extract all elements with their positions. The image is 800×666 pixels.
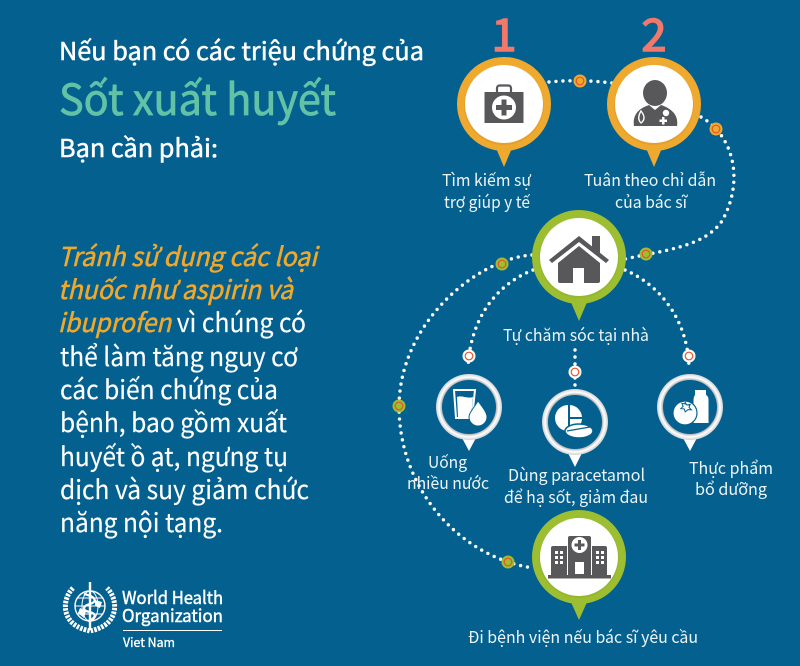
body text block: các biến chứng của — [60, 370, 278, 407]
WHO logo: Viet Nam — [123, 632, 175, 651]
icon: glass and drop — [454, 390, 487, 426]
home care — [503, 210, 649, 346]
heading — [59, 33, 424, 165]
label — [407, 449, 489, 494]
label: Tìm kiếm sự — [442, 167, 532, 191]
pin — [657, 374, 723, 451]
label: bổ dưỡng — [695, 476, 768, 500]
orange node top — [574, 74, 586, 88]
green node far left — [392, 400, 406, 412]
label: Dùng paracetamol — [508, 462, 645, 486]
label — [504, 462, 648, 508]
body text block: thuốc như aspirin và — [58, 270, 294, 307]
pin — [542, 389, 608, 467]
heading line 2: Bạn cần phải: — [59, 130, 218, 165]
number 1: 1 — [492, 0, 516, 64]
icon: doctor — [634, 80, 677, 126]
label — [689, 455, 773, 500]
orange node right — [710, 122, 722, 136]
dotted connector: step 2 to home care — [625, 117, 734, 259]
pin — [607, 57, 701, 167]
label: Tuân theo chỉ dẫn — [584, 167, 716, 191]
WHO logo — [65, 582, 223, 651]
body text block: Tránh sử dụng các loại — [58, 237, 321, 274]
hospital — [468, 510, 698, 648]
label: Uống — [428, 449, 468, 473]
icon: pills — [555, 405, 593, 438]
medicine — [504, 389, 648, 508]
white node medicine — [568, 366, 582, 378]
dotted connector: home care to hospital (outer arc) — [399, 255, 533, 568]
green node bottom — [502, 556, 514, 568]
label: của bác sĩ — [615, 189, 688, 213]
water — [407, 374, 502, 494]
pin — [532, 510, 626, 620]
step 2: follow doctor's instructions — [584, 57, 716, 213]
body text block: thể làm tăng nguy cơ — [60, 337, 298, 374]
WHO logo: Organization — [122, 603, 223, 628]
icon: house — [549, 236, 609, 283]
WHO emblem — [65, 582, 115, 631]
label: Thực phẩm — [689, 455, 773, 479]
body text block — [58, 237, 321, 540]
green node left — [496, 258, 508, 270]
label: để hạ sốt, giảm đau — [504, 484, 648, 508]
pin — [436, 374, 502, 451]
icon: first aid kit — [484, 86, 524, 123]
label — [442, 167, 532, 213]
body text block: bệnh, bao gồm xuất — [60, 403, 287, 440]
step 1: seek medical help — [442, 57, 551, 213]
label — [584, 167, 716, 213]
number 2: 2 — [642, 0, 666, 64]
nutritious food — [657, 374, 773, 500]
icon: hospital building — [548, 536, 611, 578]
icon: tomato and bottle — [673, 390, 708, 425]
label: Tự chăm sóc tại nhà — [503, 322, 649, 346]
green node right — [640, 248, 652, 260]
dotted connector: step 1 to step 2 — [549, 81, 612, 83]
pin — [532, 210, 626, 321]
label: nhiều nước — [407, 470, 489, 494]
body text block: năng nội tạng. — [60, 503, 223, 540]
body text block: huyết ồ ạt, ngưng tụ — [60, 437, 288, 474]
label: trợ giúp y tế — [444, 189, 531, 213]
dotted connector: home care to medicine — [573, 350, 577, 386]
white node food — [682, 350, 696, 362]
pin — [457, 57, 551, 167]
label: Đi bệnh viện nếu bác sĩ yêu cầu — [468, 624, 698, 648]
heading line 1: Nếu bạn có các triệu chứng của — [59, 33, 424, 68]
dotted connector: home care to food — [625, 270, 689, 368]
body text block: dịch và suy giảm chức — [60, 470, 309, 507]
body text block: ibuprofen vì chúng có — [58, 303, 306, 340]
WHO wordmark: World Health — [122, 585, 223, 610]
white node water — [462, 350, 476, 362]
dotted connector: home care to water — [468, 270, 533, 368]
heading title: Sốt xuất huyết: Sốt xuất huyết — [59, 66, 336, 128]
connector nodes — [392, 74, 722, 568]
